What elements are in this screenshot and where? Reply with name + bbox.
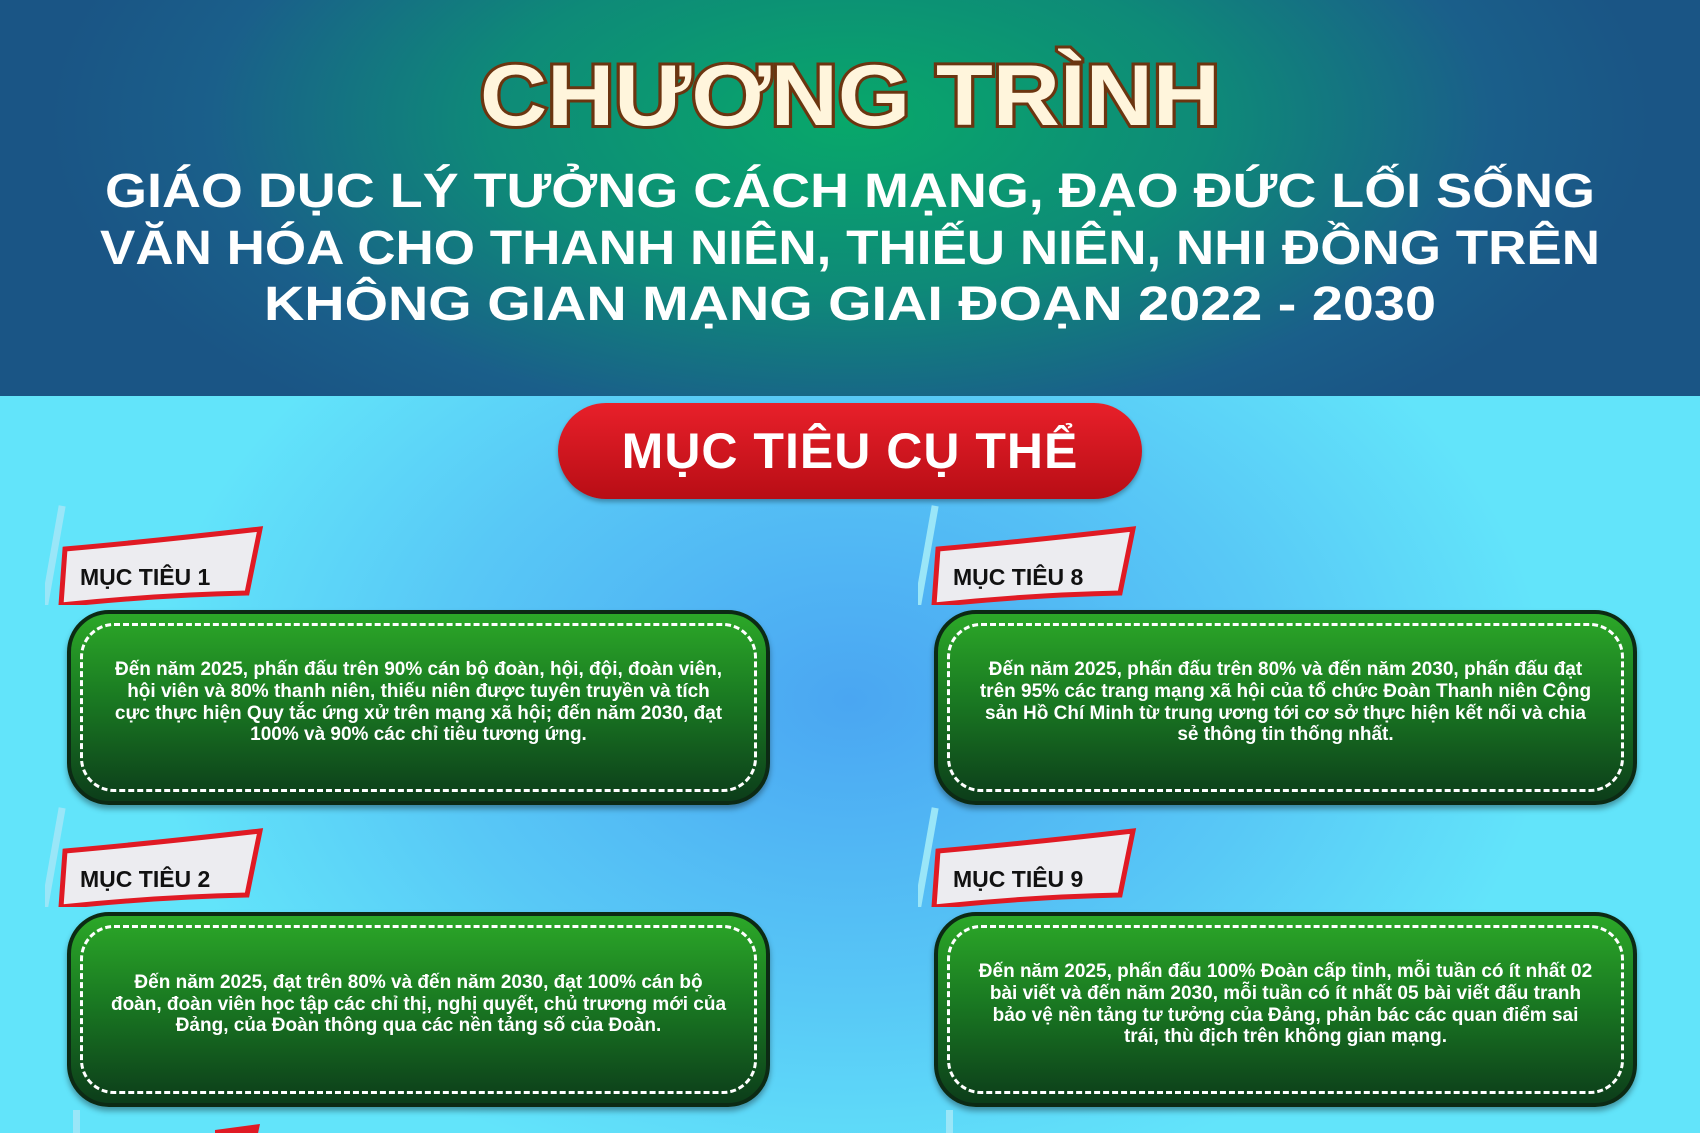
- tag: muc tieu 1: [45, 505, 264, 605]
- card 2: [67, 912, 770, 1107]
- title: CHƯƠNG TRÌNH: [480, 48, 1220, 144]
- card 1: [67, 610, 770, 805]
- red pill heading: MỤC TIÊU CỤ THỂ: [622, 423, 1078, 479]
- tag: muc tieu 8: [918, 505, 1136, 605]
- red pill heading: [558, 403, 1142, 499]
- card 2: Đến năm 2025, đạt trên 80% và đến năm 2030, đạt 100% cán bộ đoàn, đoàn viên học tập các chỉ thị, nghị quyết, chủ trương mới của Đảng, của Đoàn thông qua các nền tảng số của Đoàn.: [111, 972, 726, 1036]
- title: VĂN HÓA CHO THANH NIÊN, THIẾU NIÊN, NHI ĐỒNG TRÊN: [100, 220, 1600, 275]
- card 9: Đến năm 2025, phấn đấu 100% Đoàn cấp tỉnh, mỗi tuần có ít nhất 02 bài viết và đến năm 2030, mỗi tuần có ít nhất 05 bài viết đấu tranh bảo vệ nền tảng tư tưởng của Đảng, phản bác các quan điểm sai trái, thù địch trên không gian mạng.: [979, 961, 1592, 1047]
- card 9: [934, 912, 1637, 1107]
- card 8: Đến năm 2025, phấn đấu trên 80% và đến năm 2030, phấn đấu đạt trên 95% các trang mạng xã hội của tổ chức Đoàn Thanh niên Cộng sản Hồ Chí Minh từ trung ương tới cơ sở thực hiện kết nối và chia sẻ thông tin thống nhất.: [980, 659, 1591, 745]
- tag: muc tieu 9: [918, 807, 1136, 907]
- card 8: [934, 610, 1637, 805]
- title: KHÔNG GIAN MẠNG GIAI ĐOẠN 2022 - 2030: [264, 276, 1436, 331]
- tag: muc tieu 8: MỤC TIÊU 8: [953, 563, 1084, 590]
- tag: muc tieu 9: MỤC TIÊU 9: [953, 865, 1083, 892]
- title: [100, 46, 1600, 331]
- partial next tags: [73, 1110, 953, 1133]
- tag: muc tieu 2: [45, 807, 264, 907]
- title: GIÁO DỤC LÝ TƯỞNG CÁCH MẠNG, ĐẠO ĐỨC LỐI SỐNG: [105, 163, 1595, 218]
- header banner: [0, 0, 1700, 396]
- tag: muc tieu 2: MỤC TIÊU 2: [80, 865, 210, 892]
- tag: muc tieu 1: MỤC TIÊU 1: [80, 563, 211, 590]
- card 1: Đến năm 2025, phấn đấu trên 90% cán bộ đoàn, hội, đội, đoàn viên, hội viên và 80% thanh niên, thiếu niên được tuyên truyền và tích cực thực hiện Quy tắc ứng xử trên mạng xã hội; đến năm 2030, đạt 100% và 90% các chỉ tiêu tương ứng.: [115, 659, 722, 745]
